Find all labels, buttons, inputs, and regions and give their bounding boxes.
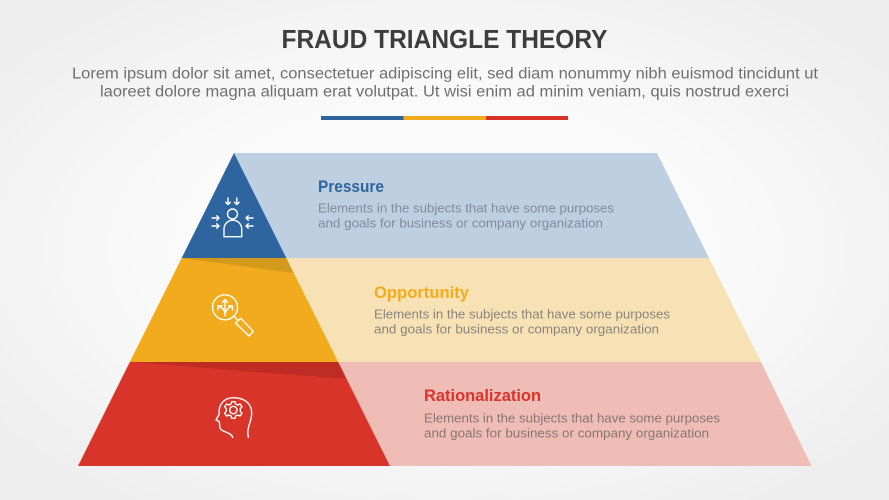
description: rationalization: Elements in the subjects that have some purposes [424, 412, 720, 426]
pyramid segment: pressure [182, 153, 286, 258]
text block: opportunity [374, 284, 670, 336]
panel: rationalization band [338, 362, 812, 466]
tricolor divider [321, 116, 568, 120]
shadow under opportunity segment [130, 362, 346, 379]
text block: pressure [318, 178, 614, 230]
panel: pressure band [234, 153, 709, 258]
intro text: Lorem ipsum dolor sit amet, consectetuer adipiscing elit, sed diam nonummy nibh euismod tincidunt ut [72, 66, 819, 82]
description: pressure [318, 202, 614, 230]
title: FRAUD TRIANGLE THEORY [282, 24, 608, 54]
pyramid segment: opportunity [130, 258, 338, 362]
intro text [72, 66, 819, 100]
pyramid segment: rationalization [78, 362, 390, 466]
text block: rationalization [424, 387, 720, 440]
description: opportunity [374, 308, 670, 336]
description: opportunity: Elements in the subjects that have some purposes [374, 308, 670, 322]
icon: person under pressure [212, 198, 253, 237]
description: pressure: Elements in the subjects that have some purposes [318, 202, 614, 216]
description: rationalization: and goals for business or company organization [424, 426, 709, 440]
description: rationalization [424, 412, 720, 440]
intro text: laoreet dolore magna aliquam erat volutpat. Ut wisi enim ad minim veniam, quis nostrud exerci [100, 84, 789, 100]
description: opportunity: and goals for business or company organization [374, 322, 659, 336]
heading: rationalization: Rationalization [424, 387, 541, 405]
heading: pressure: Pressure [318, 178, 384, 196]
heading: opportunity: Opportunity [374, 284, 470, 302]
icon: magnifier with arrows [212, 295, 253, 336]
shadow under pressure segment [182, 258, 294, 273]
icon: head with gear [216, 398, 252, 437]
description: pressure: and goals for business or company organization [318, 216, 603, 230]
panel: opportunity band [286, 258, 761, 362]
